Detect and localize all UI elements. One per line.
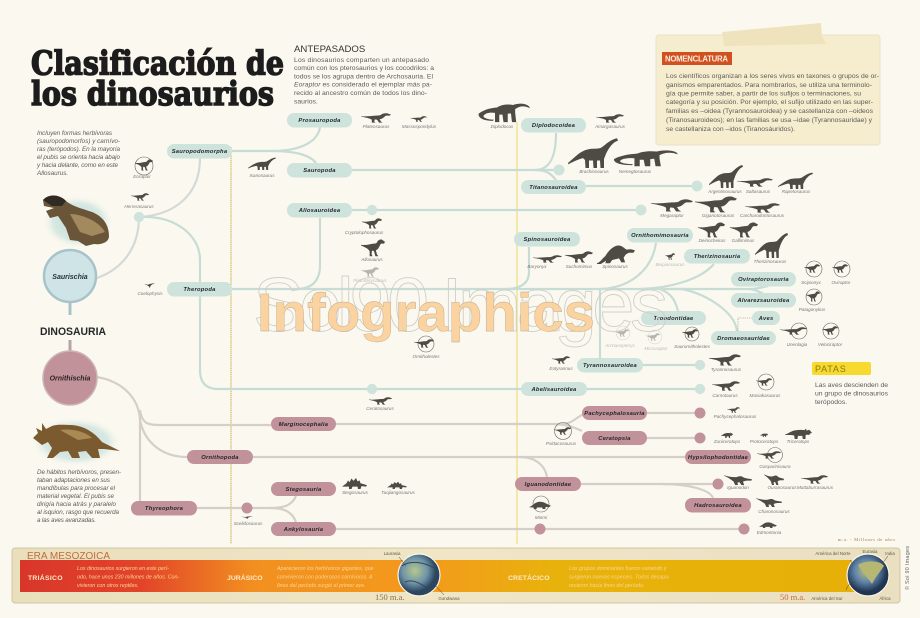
text: saurischia description: el pubis se orienta hacia abajo [37, 154, 120, 161]
dinosaur: Carnotaurus: Carnotaurus [712, 393, 738, 398]
dinosaur: Protoceratops: Protoceratops [750, 439, 779, 444]
dinosaur: Patagonykus [799, 289, 826, 312]
globe: 150 m.a.: 150 m.a. [375, 592, 405, 602]
dinosaur: Charonosaurus [756, 498, 790, 514]
pill: Stegosauria [271, 482, 336, 496]
dinosaur: Triceratops [785, 428, 812, 444]
callout: patas: Las aves descienden de [815, 382, 888, 389]
pill: Ornithopoda [187, 450, 253, 464]
pill: Sauropodomorpha [167, 144, 232, 158]
dinosaur: Microraptor [644, 330, 668, 351]
text: ornithischia description: al isquion, rasgo que recuerda [37, 509, 119, 516]
dinosaur: Velociraptor [818, 323, 843, 347]
branch nodes [134, 164, 750, 534]
dinosaur: Suchomimus: Suchomimus [566, 264, 593, 269]
antepasados heading and text: Eoraptor es considerado el ejemplar más pa- [294, 82, 432, 88]
ornithischia circle [43, 340, 97, 405]
pill: Ornithomimosauria [627, 228, 693, 242]
pill: Alvarezsauroidea: Alvarezsauroidea [736, 298, 790, 304]
period: cretácico: surgieron nuevas especies. Todos desapa- [569, 574, 670, 580]
dinosaur: Gasparinisaura [757, 448, 791, 469]
pill: Iguanodontidae [515, 477, 581, 491]
pill: Abelisauroidea: Abelisauroidea [530, 387, 577, 393]
antepasados heading and text: saurios. [294, 98, 318, 106]
dinosaur: Eotyrannus [549, 356, 573, 371]
pill: Marginocephalia: Marginocephalia [279, 422, 329, 428]
gradient band [20, 560, 880, 592]
dinosaur: Ceratosaurus: Ceratosaurus [366, 406, 394, 411]
text: ornithischia description: material vegetal. El pubis se [37, 493, 114, 500]
dinosaur: Psittacosaurus: Psittacosaurus [546, 441, 577, 446]
panel: nomenclatura: NOMENCLATURA [665, 54, 728, 64]
dinosaur: Plateosaurus [361, 113, 391, 129]
pill: Thyreophora: Thyreophora [145, 506, 184, 512]
dinosaur: Rapetosaurus: Rapetosaurus [782, 189, 811, 194]
text: saurischia description: ras (terópodos). En la mayoría [37, 146, 120, 153]
dinosaur: Saltasaurus: Saltasaurus [746, 189, 771, 194]
dinosaur: Giganotosaurus [695, 197, 737, 218]
pill: Abelisauroidea [521, 382, 587, 396]
text: ornithischia description: a las aves avanzadas. [37, 517, 96, 524]
pill: Aves [752, 311, 780, 325]
dinosaur: Ornitholestes [412, 336, 440, 359]
dinosauria label: DINOSAURIA [40, 326, 106, 338]
dinosaur: Protoceratops [750, 433, 779, 444]
dinosaur: Gallimimus [730, 222, 758, 243]
pill: Ankylosauria [271, 522, 336, 536]
dinosaur: Zuniceratops: Zuniceratops [713, 439, 741, 444]
dinosaur: Deinocheirus [698, 222, 726, 243]
era guide lines [231, 122, 517, 544]
dinosaur: Cryptolophosaurus [345, 218, 384, 235]
saurischia circle [44, 250, 96, 315]
pill: Allosauroidea: Allosauroidea [298, 208, 341, 214]
text: ornithischia description: De hábitos herbívoros, presen- [37, 469, 121, 476]
pill: Pachycephalosauria: Pachycephalosauria [584, 411, 645, 417]
illustration: triceratops [30, 417, 122, 467]
dinosaur: Carcharodontosaurus [740, 203, 785, 218]
illustration: allosaurus [42, 195, 114, 249]
text: saurischia description: (sauropodomorfos) y carnívo- [37, 138, 120, 145]
era heading: ERA MESOZOICA [27, 551, 110, 562]
dinosaur: Nemegtosaurus: Nemegtosaurus [619, 169, 652, 174]
nomenclatura label [662, 52, 732, 65]
dinosaur: Saurornitholestes: Saurornitholestes [674, 344, 711, 349]
dinosaur: Stegosaurus [342, 478, 369, 495]
dinosaur: Pachycephalosaurus [714, 407, 757, 419]
pill: Marginocephalia [271, 417, 336, 431]
pill: Theropoda: Theropoda [183, 287, 216, 293]
period: triásico [28, 566, 179, 589]
dinosaur: Edmontonia: Edmontonia [757, 530, 782, 535]
dinosaur: Plateosaurus: Plateosaurus [363, 124, 390, 129]
pill: Alvarezsauroidea [731, 293, 796, 308]
dinosaur: Oviraptor [832, 261, 851, 285]
dinosaur: Scipionyx: Scipionyx [801, 280, 822, 285]
dinosaur: Stegosaurus: Stegosaurus [342, 490, 369, 495]
nomenclatura text: (Tiranosauroideos); en las familias se usa –idae (Tyrannosauridae) y [666, 117, 873, 124]
globe: 150 m.a. [375, 551, 460, 602]
panel: nomenclatura [656, 23, 880, 145]
pill: Hadrosauroidea: Hadrosauroidea [694, 503, 742, 509]
saurischia branch lines [97, 127, 768, 389]
pill: Theropoda [167, 282, 232, 296]
callout: patas: PATAS [815, 364, 847, 374]
dinosaur: Tyrannosaurus: Tyrannosaurus [711, 367, 742, 372]
dinosaur: Minmi [529, 496, 551, 520]
globe: 150 m.a.: Laurasia [384, 551, 401, 556]
dinosaur: Triceratops: Triceratops [787, 439, 810, 444]
period: jurásico: Aparecieron los herbívoros gigantes, que [276, 566, 374, 572]
pill: Titanosauroidea: Titanosauroidea [529, 185, 578, 191]
dinosaur: Tuojiangosaurus [381, 482, 416, 495]
pill: Ornithomimosauria: Ornithomimosauria [631, 233, 689, 239]
dinosaur: Therizinosaurus [754, 233, 788, 264]
period: triásico: vivieron con otros reptiles. [77, 583, 139, 589]
globe: 150 m.a.: Gondwana [438, 596, 460, 601]
globe: 50 m.a.: India [885, 551, 895, 556]
dinosaur: Baryonyx [527, 255, 562, 269]
dinosaur: Spinosaurus [597, 246, 635, 269]
nomenclatura text: Los científicos organizan a los seres vivos en taxones o grupos de or- [666, 73, 879, 80]
nomenclatura text: categoría y su posición. Por ejemplo, el sufijo utilizado en las super- [666, 99, 873, 106]
dinosaur: Diplodocus [479, 104, 530, 129]
period: cretácico: CRETÁCICO [508, 573, 550, 582]
dinosaur: Saurornitholestes [674, 327, 711, 349]
dinosaur: Megaraptor [651, 199, 693, 218]
dinosaur: Zuniceratops [713, 432, 741, 444]
dinosaur: Iguanodon: Iguanodon [727, 485, 749, 490]
dinosaur: Ceratosaurus [366, 397, 394, 411]
pill: Diplodocoidea: Diplodocoidea [532, 123, 576, 129]
pill: Prosauropoda [287, 113, 352, 128]
watermark: Sol90 Images outline: Sol90 Images [253, 263, 668, 348]
pill: Allosauroidea [287, 203, 352, 218]
dinosaur: Archaeopteryx [604, 326, 636, 348]
text: saurischia description: Incluyen formas herbívoras [37, 130, 113, 137]
dinosaur: Coelophysis [137, 283, 163, 296]
dinosaur: Ornitholestes: Ornitholestes [412, 354, 440, 359]
dinosaur: Masiakasaurus: Masiakasaurus [750, 393, 781, 398]
watermark: Infographics: Infographics [257, 283, 595, 343]
antepasados heading and text: todos se los agrupa dentro de Archosauria. El [294, 74, 433, 80]
dinosaur: Amargasaurus: Amargasaurus [594, 124, 626, 129]
dinosaur: Suchomimus [565, 251, 593, 269]
ornithischia branch lines [97, 377, 740, 529]
dinosaur: Scipionyx [801, 261, 822, 285]
dinosaur: Massospondylus: Massospondylus [402, 124, 437, 129]
globe: 50 m.a. [780, 549, 895, 602]
copyright: © Sol 90 Images [904, 546, 911, 590]
pill: Iguanodontidae: Iguanodontidae [525, 482, 572, 488]
ornithischia circle: Ornithischia [50, 376, 91, 382]
text: saurischia description: Allosaurus. [36, 170, 68, 177]
period: jurásico [227, 566, 374, 589]
nomenclatura text: ganismos emparentados. Para nombrarlos, se utiliza una terminolo- [666, 82, 872, 89]
antepasados heading and text [294, 44, 434, 106]
dinosaur: Argentinosaurus [707, 165, 743, 194]
dinosaur: Nemegtosaurus [614, 150, 678, 174]
pill: Pachycephalosauria [582, 406, 647, 420]
dinosaur: Isanosaurus: Isanosaurus [249, 173, 275, 178]
period: cretácico: recieron hacia fines del período. [569, 583, 644, 589]
dinosaur: Tyrannosaurus [709, 354, 742, 372]
globe: 50 m.a.: África [879, 596, 891, 601]
dinosaur: Allosaurus [360, 240, 385, 262]
dinosaur: Scelidosaurus: Scelidosaurus [234, 521, 263, 526]
dinosaur: Brachiosaurus: Brachiosaurus [579, 169, 609, 174]
dinosaur: Pachycephalosaurus: Pachycephalosaurus [714, 414, 757, 419]
pill: Sauropoda: Sauropoda [303, 168, 336, 174]
pill: Troodontidae [641, 311, 706, 325]
dinosaur: Isanosaurus [248, 158, 276, 178]
dinosaur: Massospondylus [402, 116, 437, 129]
pill: Hadrosauroidea [685, 498, 751, 512]
antepasados heading and text: ANTEPASADOS [294, 44, 365, 55]
dinosaur: Psittacosaurus [546, 422, 577, 446]
pill: Therizinosauria [684, 249, 750, 264]
pill: Stegosauria: Stegosauria [286, 487, 322, 493]
panel: era mesozoica timeline [12, 548, 900, 603]
dinosaur: Diplodocus: Diplodocus [491, 124, 514, 129]
dinosaur: Baryonyx: Baryonyx [527, 264, 547, 269]
dinosaur: Muttaburrasaurus [797, 475, 834, 490]
period: jurásico: fines del período surgió el primer ave. [277, 583, 366, 589]
pill: Ceratopsia: Ceratopsia [598, 436, 631, 442]
pill: Titanosauroidea [521, 180, 586, 194]
dinosaur: Piatnitzkysaurus: Piatnitzkysaurus [353, 278, 387, 283]
pill: Tyrannosauroidea: Tyrannosauroidea [583, 363, 638, 369]
saurischia circle: Saurischia [52, 274, 88, 281]
dinosaur: Edmontonia [757, 522, 782, 535]
dinosaur: Piatnitzkysaurus [353, 267, 387, 283]
dinosaur: Gallimimus: Gallimimus [732, 238, 755, 243]
pill: Sauropodomorpha: Sauropodomorpha [172, 149, 228, 155]
dinosaur: Eoraptor [133, 157, 153, 179]
dinosaur: Scelidosaurus [234, 516, 263, 526]
period: jurásico: JURÁSICO [227, 573, 263, 582]
dinosaur: Therizinosaurus: Therizinosaurus [754, 259, 787, 264]
globe: 50 m.a.: Eurasia [863, 549, 878, 554]
millones de años note: m.a. - Millones de años [838, 537, 895, 542]
title [31, 44, 284, 113]
dinosaur: Iguanodon [724, 475, 752, 490]
dinosaur: Allosaurus: Allosaurus [360, 257, 383, 262]
nomenclatura text: familias es –oidea (Tyrannosauroidea) y se castellaniza con –oideos [666, 108, 874, 115]
dinosaur: Saltasaurus [737, 178, 773, 194]
dinosaur: Minmi: Minmi [535, 515, 548, 520]
callout: patas: un grupo de dinosaurios [815, 390, 889, 398]
dinosaur: Megaraptor: Megaraptor [660, 213, 684, 218]
pill: Tyrannosauroidea [577, 358, 643, 372]
pill: Oviraptorosauria [731, 272, 796, 286]
antepasados heading and text: Los dinosaurios comparten un antepasado [294, 57, 429, 64]
pill: Ceratopsia [582, 431, 647, 445]
globe: 50 m.a.: América del Norte [815, 551, 851, 556]
period: jurásico: convivieron con poderosos carnívoros. A [277, 574, 373, 580]
dinosaur: Velociraptor: Velociraptor [818, 342, 843, 347]
dinosaur: Carnotaurus [712, 381, 740, 398]
tape [722, 23, 826, 46]
period: cretácico [508, 566, 670, 589]
antepasados heading and text: común con los pterosaurios y los cocodrilos: a [294, 65, 434, 72]
title: los dinosaurios [31, 74, 274, 113]
callout: patas [812, 362, 889, 406]
dinosaur: Argentinosaurus: Argentinosaurus [707, 189, 742, 194]
period: triásico: Los dinosaurios surgieron en este perí- [77, 566, 169, 572]
title: Clasificación de [31, 44, 284, 82]
nomenclatura text [666, 73, 879, 133]
period: cretácico: Los grupos dominantes fueron variando y [569, 566, 667, 572]
dinosaur: Unenlagia [780, 323, 808, 347]
pill: Troodontidae: Troodontidae [654, 316, 694, 322]
pill: Hypsilophodontidae [685, 450, 751, 464]
pill: Spinosauroidea [514, 232, 580, 246]
dinosaur: Brachiosaurus [568, 138, 618, 174]
text: saurischia description: y hacia delante, como en este [36, 162, 118, 169]
pill: Spinosauroidea: Spinosauroidea [524, 237, 571, 243]
pill: Oviraptorosauria: Oviraptorosauria [738, 277, 789, 283]
dinosaur: Masiakasaurus [750, 374, 781, 398]
dinosaur: Ouranosaurus: Ouranosaurus [767, 485, 797, 490]
pill: Diplodocoidea [521, 118, 586, 132]
antepasados heading and text: recido al ancestro común de todos los dino- [294, 90, 427, 97]
period: triásico: odo, hace unos 230 millones de años. Con- [77, 574, 179, 580]
pill: Sauropoda [287, 163, 352, 178]
dinosaur: Tuojiangosaurus: Tuojiangosaurus [381, 490, 416, 495]
dinosaur: Archaeopteryx: Archaeopteryx [604, 343, 636, 348]
dinosaur: Eotyrannus: Eotyrannus [549, 366, 573, 371]
dinosaur: Coelophysis: Coelophysis [137, 291, 163, 296]
dinosaur: Beipiaosaurus: Beipiaosaurus [655, 262, 685, 267]
globe: 50 m.a.: América del Sur [811, 596, 843, 601]
dinosaur: Gasparinisaura: Gasparinisaura [759, 464, 791, 469]
pill: Hypsilophodontidae: Hypsilophodontidae [688, 455, 749, 461]
period: triásico: TRIÁSICO [28, 573, 63, 582]
dinosaur: Giganotosaurus: Giganotosaurus [702, 213, 735, 218]
callout: patas: terópodos. [815, 399, 847, 406]
globe: 50 m.a.: 50 m.a. [780, 592, 805, 602]
dinosaur: Herrerasaurus [124, 193, 154, 209]
pill: Prosauropoda: Prosauropoda [298, 118, 341, 124]
dinosaur: Beipiaosaurus [655, 253, 685, 267]
dinosaur: Carcharodontosaurus: Carcharodontosaurus [740, 213, 785, 218]
pill: Ornithopoda: Ornithopoda [201, 455, 239, 461]
dinosaur: Patagonykus: Patagonykus [799, 307, 826, 312]
dinosaur: Oviraptor: Oviraptor [832, 280, 851, 285]
dinosaur: Herrerasaurus: Herrerasaurus [124, 204, 154, 209]
pill: Aves: Aves [758, 316, 774, 322]
pill: Thyreophora [131, 501, 197, 516]
nomenclatura text: gía que permite saber, a partir de los sufijos o terminaciones, su [666, 90, 861, 98]
dinosaur: Ouranosaurus [764, 474, 797, 490]
pill: Dromaeosauridae [711, 331, 776, 345]
dinosaur: Amargasaurus [594, 114, 626, 129]
dinosaur: Charonosaurus: Charonosaurus [758, 509, 790, 514]
text: ornithischia description: dirigía hacia atrás y paralelo [37, 501, 116, 508]
dinosaur: Eoraptor: Eoraptor [133, 174, 151, 179]
text: saurischia description [36, 130, 120, 177]
dinosaur: Microraptor: Microraptor [644, 346, 668, 351]
dinosaur: Muttaburrasaurus: Muttaburrasaurus [797, 485, 834, 490]
text: ornithischia description [37, 469, 121, 524]
pill: Ankylosauria: Ankylosauria [283, 527, 324, 533]
text: ornithischia description: taban adaptaciones en sus [37, 477, 111, 484]
dinosaur: Cryptolophosaurus: Cryptolophosaurus [345, 230, 384, 235]
dinosaur: Deinocheirus: Deinocheirus [699, 238, 726, 243]
pill: Dromaeosauridae: Dromaeosauridae [717, 336, 770, 342]
dinosaur: Spinosaurus: Spinosaurus [602, 264, 628, 269]
pill: Therizinosauria: Therizinosauria [694, 254, 741, 260]
dinosaur: Unenlagia: Unenlagia [787, 342, 808, 347]
text: ornithischia description: mandíbulas para procesar el [37, 485, 116, 492]
nomenclatura text: se castellaniza con –idos (Tiranosáuridos). [666, 126, 795, 133]
dinosaur: Rapetosaurus [778, 173, 813, 194]
